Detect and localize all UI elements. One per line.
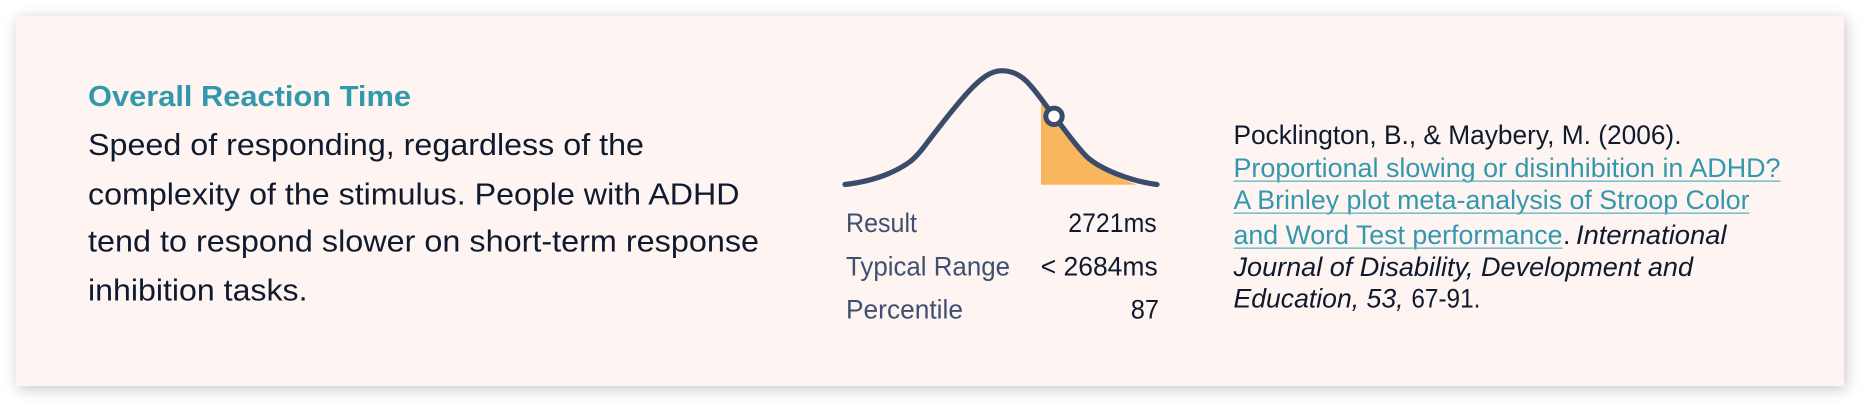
row: typical range: [846, 252, 1158, 282]
citation: Pocklington, B., & Maybery, M. (2006).: [1234, 120, 1682, 150]
citation: and Word Test performance: [1234, 220, 1562, 250]
row: typical range: Typical Range: [846, 252, 1010, 282]
text block: description: inhibition tasks.: [88, 274, 308, 308]
row: result: 2721ms: [1068, 208, 1157, 238]
chart: bell curve with shaded percentile: [845, 71, 1157, 185]
text block: description: complexity of the stimulus. People with ADHD: [88, 178, 739, 212]
citation: Proportional slowing or disinhibition in ADHD?: [1234, 153, 1780, 183]
row: percentile: Percentile: [846, 294, 963, 324]
citation: .: [1563, 220, 1570, 250]
row: result: Result: [846, 208, 918, 238]
citation: [1232, 120, 1780, 314]
shaded tail area: [1041, 96, 1137, 185]
text block: description: Speed of responding, regardless of the: [88, 128, 644, 162]
row: percentile: [846, 294, 1159, 324]
row: result: [846, 208, 1157, 238]
result marker: [1046, 108, 1062, 125]
text block: description: tend to respond slower on short-term response: [88, 224, 759, 258]
row: percentile: 87: [1131, 294, 1159, 324]
citation: International: [1576, 220, 1728, 250]
text block: description: [88, 128, 759, 308]
citation: Journal of Disability, Development and: [1232, 252, 1694, 282]
row: typical range: < 2684ms: [1041, 252, 1158, 282]
citation: A Brinley plot meta-analysis of Stroop Color: [1234, 185, 1750, 215]
bell curve line: [845, 71, 1157, 184]
heading: overall reaction time: Overall Reaction Time: [88, 81, 411, 113]
citation: Education, 53,: [1234, 284, 1404, 314]
citation: 67-91.: [1411, 284, 1480, 314]
stats table: [846, 208, 1159, 324]
